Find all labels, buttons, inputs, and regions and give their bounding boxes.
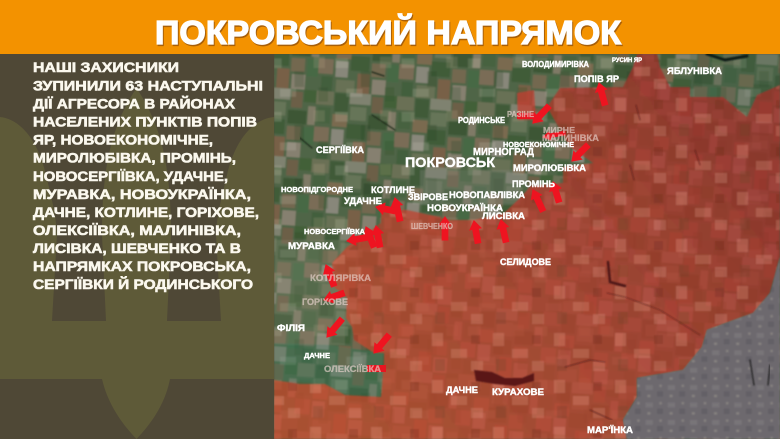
label: Kotliarivka: КОТЛЯРІВКА — [310, 273, 371, 284]
label: Myrnohrad: МИРНОГРАД — [473, 147, 534, 158]
text block: summary: ЯР, НОВОЕКОНОМІЧНЕ, — [33, 132, 213, 148]
label: Novoserhiivka: НОВОСЕРГІЇВКА — [304, 227, 366, 236]
label: Lysivka: ЛИСІВКА — [482, 211, 525, 222]
label: Kurakhove: КУРАХОВЕ — [492, 387, 544, 397]
text block: summary: НАШІ ЗАХИСНИКИ — [33, 59, 179, 75]
arrow: Kotlyne — [390, 197, 404, 222]
label: Raisne: РАЗІНЕ — [507, 109, 534, 119]
arrow: Kotliarivka — [323, 264, 338, 288]
arrow: Promin east — [549, 181, 562, 204]
text block: summary — [33, 59, 263, 292]
label: Novopavlivka: НОВОПАВЛІВКА — [449, 190, 525, 201]
label: Shevchenko: ШЕВЧЕНКО — [411, 221, 453, 231]
label: Muravka: МУРАВКА — [288, 241, 335, 252]
label: Oleksiivka: ОЛЕКСІЇВКА — [324, 364, 381, 375]
label: Volodymyrivka: ВОЛОДИМИРІВКА — [522, 60, 589, 69]
map: Kurakhove reservoir and creeks — [300, 54, 770, 420]
arrow: Shevchenko north — [440, 217, 450, 240]
arrow: Filiia — [326, 316, 345, 338]
labels: settlements — [277, 58, 722, 435]
label: Novopidhorodne: НОВОПІДГОРОДНЕ — [281, 185, 353, 194]
label: Mirne: МИРНЕ — [543, 125, 575, 135]
label: Popiv Yar: ПОПІВ ЯР — [574, 74, 619, 84]
arrow: Novoserhiivka 1 — [364, 226, 376, 249]
label: Yablunivka: ЯБЛУНІВКА — [667, 66, 722, 77]
label: Selydove: СЕЛИДОВЕ — [500, 257, 551, 267]
label: Dachne: ДАЧНЕ — [446, 385, 478, 396]
title: ПОКРОВСЬКИЙ НАПРЯМОК — [156, 14, 623, 52]
text block: summary: НОВОСЕРГІЇВКА, УДАЧНЕ, — [33, 168, 228, 184]
arrow: Lysivka — [496, 219, 510, 244]
arrow: Mirne — [542, 130, 566, 140]
map: grey territory — [623, 257, 780, 439]
label: Novoekonomichne: НОВОЕКОНОМІЧНЕ — [503, 140, 574, 149]
panel: map — [274, 54, 780, 439]
map: satellite field base — [274, 54, 780, 439]
arrow: Horikhove — [323, 290, 346, 304]
arrow: Malynivka — [571, 142, 591, 162]
text block: summary: МУРАВКА, НОВОУКРАЇНКА, — [33, 186, 251, 202]
arrow: Promin south — [530, 189, 546, 213]
text block: summary: ДАЧНЕ, КОТЛИНЕ, ГОРІХОВЕ, — [33, 204, 259, 220]
text block: summary: ЛИСІВКА, ШЕВЧЕНКО ТА В — [33, 240, 241, 256]
text block: summary: МИРОЛЮБІВКА, ПРОМІНЬ, — [33, 150, 236, 166]
arrow: Popiv Yar — [595, 82, 608, 106]
label: Udachne: УДАЧНЕ — [344, 196, 382, 207]
text block: summary: ДІЇ АГРЕСОРА В РАЙОНАХ — [33, 94, 236, 112]
arrow: Udachne — [375, 202, 395, 215]
panel: left background with trident — [0, 54, 274, 439]
arrow: Raisne — [532, 103, 552, 124]
arrow: Muravka — [346, 234, 368, 246]
label: Promin: ПРОМІНЬ — [512, 179, 555, 190]
label: Novoukrainka: НОВОУКРАЇНКА — [427, 203, 503, 214]
label: Malynivka: МАЛИНІВКА — [542, 133, 599, 144]
label: Myroliubivka: МИРОЛЮБІВКА — [513, 163, 586, 174]
label: Rodynske: РОДИНСЬКЕ — [458, 116, 506, 125]
label: Serhiivka: СЕРГІЇВКА — [316, 145, 364, 156]
label: Zvirove: ЗВІРОВЕ — [408, 192, 448, 203]
arrow: Novoserhiivka 2 — [372, 225, 384, 248]
text block: summary: ЗУПИНИЛИ 63 НАСТУПАЛЬНІ — [33, 78, 263, 94]
label: Dachne small: ДАЧНЕ — [304, 351, 330, 360]
title: ПОКРОВСЬКИЙ НАПРЯМОК — [155, 13, 622, 51]
text block: summary: СЕРГІЇВКИ Й РОДИНСЬКОГО — [33, 275, 253, 292]
text block: summary: НАСЕЛЕНИХ ПУНКТІВ ПОПІВ — [33, 114, 257, 130]
text block: summary: ОЛЕКСІЇВКА, МАЛИНІВКА, — [33, 222, 241, 238]
marker: Raisne red block — [517, 113, 534, 119]
label: Kotlyne: КОТЛИНЕ — [371, 185, 415, 196]
label: Horikhove: ГОРІХОВЕ — [302, 297, 348, 308]
header bar — [0, 0, 780, 54]
label: Rusyn Yar: РУСИН ЯР — [612, 58, 642, 64]
label: Filiia: ФІЛІЯ — [277, 323, 305, 333]
marker: Oleksiivka red block — [367, 365, 386, 372]
text block: summary: НАПРЯМКАХ ПОКРОВСЬКА, — [33, 258, 251, 274]
arrow: Oleksiivka — [373, 332, 392, 354]
map: occupied territory red overlay — [274, 54, 780, 439]
arrow: Novoukrainka — [469, 220, 482, 244]
label: Pokrovsk: ПОКРОВСЬК — [405, 154, 495, 170]
label: Marinka: МАР'ЇНКА — [587, 425, 634, 435]
